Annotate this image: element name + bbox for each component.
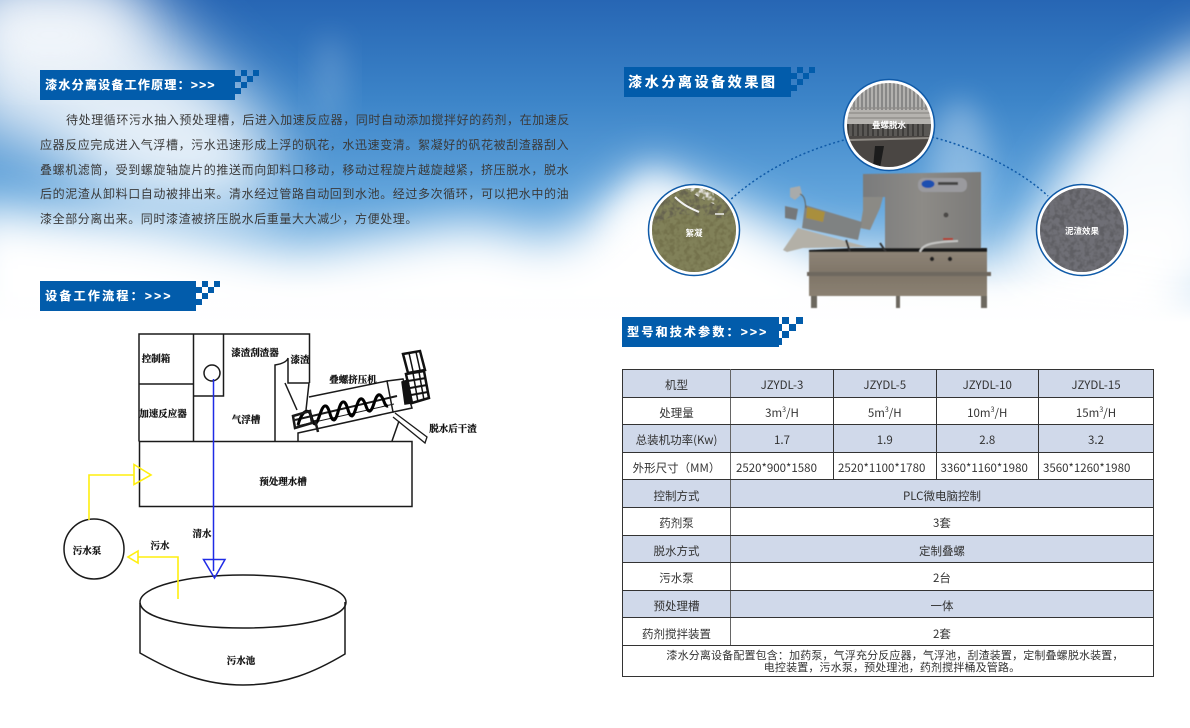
- parameter table: 1.7: [774, 432, 790, 448]
- yellow pipe: pump to tank: [89, 464, 151, 520]
- parameter table: 2套: [933, 626, 951, 642]
- lower tank: [140, 442, 412, 506]
- parameter table: 3m3/H: [765, 405, 799, 421]
- principle text block: 应器反应完成进入气浮槽，污水迅速形成上浮的矾花，水迅速变清。絮凝好的矾花被刮渣器刮入: [40, 138, 569, 152]
- parameter table: 5m3/H: [868, 405, 902, 421]
- diagram labels: 脱水后干渣: [429, 421, 477, 435]
- parameter table: JZYDL-3: [761, 377, 803, 393]
- parameter table: 脱水方式: [654, 543, 700, 559]
- diagram labels: 叠螺挤压机: [329, 372, 377, 386]
- parameter table: JZYDL-10: [963, 377, 1012, 393]
- parameter table: 2520*1100*1780: [838, 460, 925, 476]
- wastewater pool: [140, 575, 346, 685]
- heading: model and parameters: 型号和技术参数：>>>: [627, 325, 768, 339]
- parameter table: 药剂泵: [659, 515, 694, 531]
- parameter table: 机型: [665, 377, 688, 393]
- diagram labels: 预处理水槽: [259, 474, 307, 488]
- principle text block: 后的泥渣从卸料口自动被排出来。清水经过管路自动回到水池。经过多次循环，可以把水中的油: [40, 187, 569, 201]
- heading: effect images: [624, 67, 815, 97]
- parameter table: 电控装置，污水泵，预处理池，药剂搅拌桶及管路。: [764, 659, 1020, 675]
- principle text block: 待处理循环污水抽入预处理槽，后进入加速反应器，同时自动添加搅拌好的药剂，在加速反: [66, 113, 570, 127]
- diagram labels: 控制箱: [142, 351, 171, 365]
- parameter table: 定制叠螺: [919, 543, 965, 559]
- diagram labels: 气浮槽: [232, 412, 261, 426]
- diagram labels: 清水: [192, 526, 212, 540]
- circle: flocculation: [648, 184, 740, 276]
- screw press: [285, 379, 427, 443]
- parameter table: 10m3/H: [967, 405, 1007, 421]
- circle: flocculation: 絮凝: [685, 228, 703, 238]
- parameter table: 总装机功率(Kw): [636, 432, 717, 448]
- parameter table: 1.9: [877, 432, 893, 448]
- parameter table: 3560*1260*1980: [1043, 460, 1130, 476]
- parameter table: 控制方式: [654, 488, 700, 504]
- parameter table: 漆水分离设备配置包含：加药泵，气浮充分反应器，气浮池，刮渣装置，定制叠螺脱水装置，: [666, 647, 1124, 663]
- circle: sludge result: 泥渣效果: [1065, 226, 1099, 236]
- diagram labels: 污水: [150, 538, 170, 552]
- diagram labels: 污水泵: [73, 543, 102, 557]
- heading: model and parameters: [622, 317, 803, 347]
- heading: work flow: [40, 281, 220, 311]
- parameter table: 预处理槽: [654, 598, 700, 614]
- circle: screw dewatering: 叠螺脱水: [872, 120, 906, 130]
- diagram labels: 污水池: [227, 653, 256, 667]
- parameter table: PLC微电脑控制: [903, 488, 981, 504]
- parameter table: 2.8: [979, 432, 995, 448]
- blue pipe: clean water: [204, 379, 225, 578]
- parameter table: JZYDL-5: [863, 377, 906, 393]
- principle text block: 漆全部分离出来。同时漆渣被挤压脱水后重量大大减少，方便处理。: [40, 212, 418, 226]
- heading: working principle: 漆水分离设备工作原理：>>>: [45, 78, 216, 92]
- parameter table: 处理量: [659, 405, 694, 421]
- process flow diagram: [63, 333, 477, 686]
- heading: working principle: [40, 70, 259, 100]
- parameter table: 3套: [933, 515, 951, 531]
- pump: [64, 519, 124, 579]
- parameter table: 外形尺寸（MM）: [633, 460, 720, 476]
- dotted arcs: [728, 137, 1048, 202]
- machine: [783, 172, 991, 308]
- parameter table: JZYDL-15: [1071, 377, 1121, 393]
- parameter table: [622, 369, 1154, 677]
- diagram labels: 漆渣: [290, 352, 310, 366]
- yellow pipe: pool to pump: [128, 551, 178, 599]
- parameter table: 污水泵: [659, 570, 694, 586]
- parameter table: 15m3/H: [1076, 405, 1116, 421]
- circle: sludge result: [1036, 184, 1128, 276]
- principle text block: [40, 113, 570, 226]
- diagram labels: [73, 345, 477, 667]
- motor: [402, 351, 429, 404]
- circle: screw dewatering: [844, 80, 935, 170]
- parameter table: 2台: [933, 570, 951, 586]
- heading: effect images: 漆水分离设备效果图: [628, 74, 777, 90]
- parameter table: 药剂搅拌装置: [642, 626, 711, 642]
- parameter table: 3360*1160*1980: [940, 460, 1028, 476]
- heading: work flow: 设备工作流程：>>>: [45, 289, 173, 303]
- parameter table: 3.2: [1088, 432, 1104, 448]
- principle text block: 叠螺机滤筒，受到螺旋轴旋片的推送而向卸料口移动，移动过程旋片越旋越紧，挤压脱水，脱水: [40, 163, 569, 177]
- diagram labels: 漆渣刮渣器: [231, 345, 279, 359]
- diagram labels: 加速反应器: [139, 406, 187, 420]
- parameter table: 2520*900*1580: [736, 460, 817, 476]
- upper equipment box: [139, 334, 310, 442]
- parameter table: 一体: [930, 598, 954, 614]
- effect illustration: machine and detail circles: [648, 78, 1128, 309]
